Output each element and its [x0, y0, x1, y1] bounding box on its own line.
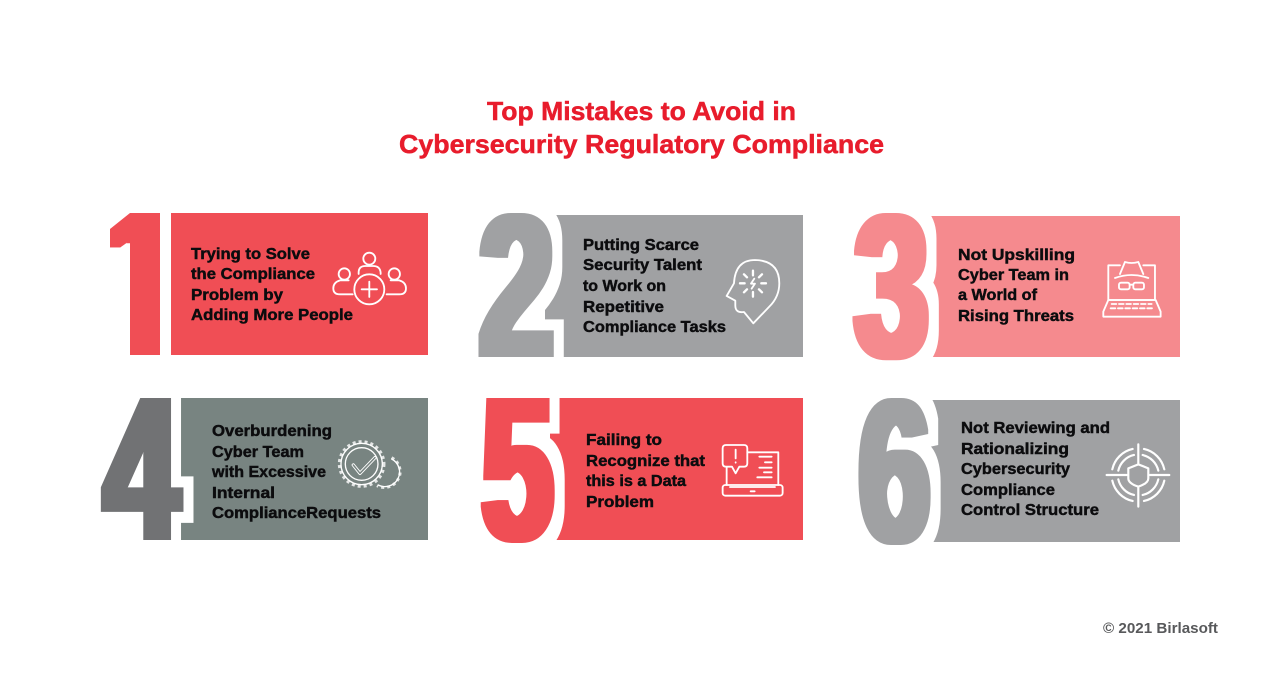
text 2 [583, 237, 726, 336]
text 5: this is a Data [586, 473, 686, 490]
text 6: Compliance [961, 482, 1055, 499]
icon: head with spark [727, 260, 779, 323]
text 6: Not Reviewing and [961, 420, 1110, 437]
number 1: 1 [88, 163, 192, 402]
icon: people plus [333, 253, 406, 304]
text 4: ComplianceRequests [212, 505, 381, 522]
text 2: Security Talent [583, 257, 702, 274]
panel 2: repetitive tasks [479, 175, 803, 398]
text 6: Rationalizing [961, 441, 1069, 458]
number 3: 3 [854, 174, 929, 400]
text 1 [191, 246, 353, 324]
text 1: Problem by [191, 287, 283, 304]
number 4: 4 [104, 358, 179, 581]
text 1: Trying to Solve [191, 246, 310, 263]
text 1: Adding More People [191, 307, 353, 324]
title [399, 96, 884, 159]
text 5: Recognize that [586, 453, 705, 470]
text 1: the Compliance [191, 266, 315, 283]
text 4: Overburdening [212, 423, 332, 440]
text 3 [958, 247, 1075, 325]
text 6 [961, 420, 1110, 519]
text 4: Cyber Team [212, 444, 304, 461]
icon: hacker laptop [1103, 262, 1161, 317]
text 4 [211, 423, 381, 522]
text 3: Not Upskilling [958, 247, 1075, 264]
copyright: © 2021 Birlasoft [1103, 620, 1218, 637]
text 5: Failing to [586, 432, 662, 449]
text 4: Internal [212, 485, 275, 502]
text 3: Cyber Team in [958, 267, 1069, 284]
number 5: 5 [482, 357, 553, 582]
text 3: Rising Threats [958, 308, 1074, 325]
panel 3: upskilling [854, 174, 1180, 400]
text 5 [586, 432, 705, 511]
icon: gears with check [339, 442, 400, 487]
panel 6: control structure [859, 359, 1180, 584]
title: Top Mistakes to Avoid in [487, 96, 796, 126]
text 2: Compliance Tasks [583, 319, 726, 336]
number 6: 6 [859, 359, 930, 584]
text 2: to Work on [583, 278, 666, 295]
panel 5: data problem [482, 357, 803, 582]
text 6: Cybersecurity [961, 461, 1070, 478]
title: Cybersecurity Regulatory Compliance [399, 129, 884, 159]
number 2: 2 [479, 175, 554, 398]
icon: target shield [1107, 444, 1169, 507]
icon: laptop with alert [723, 445, 783, 496]
text 2: Putting Scarce [583, 237, 699, 254]
text 3: a World of [958, 287, 1038, 304]
text 5: Problem [586, 494, 654, 511]
text 4: with Excessive [211, 464, 326, 481]
panel 1: adding more people [110, 213, 428, 355]
text 2: Repetitive [583, 299, 664, 316]
text 6: Control Structure [961, 502, 1099, 519]
panel 4: overburdening [104, 358, 428, 581]
